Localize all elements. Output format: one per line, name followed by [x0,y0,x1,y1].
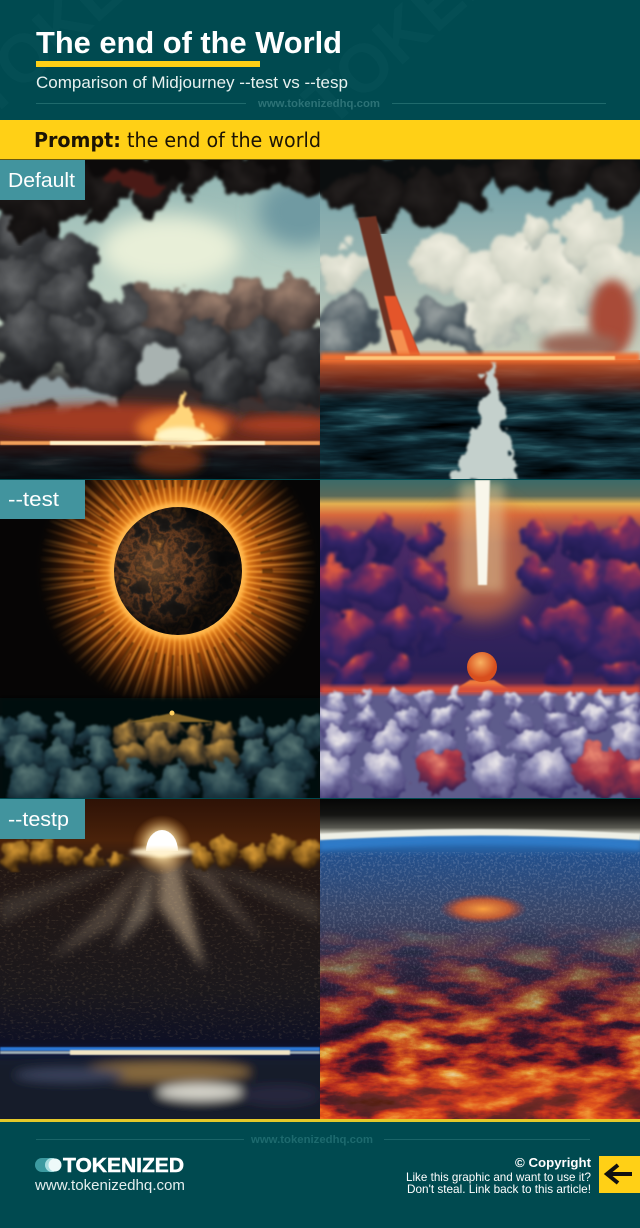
tab: test [0,480,85,519]
tab: testp [0,799,85,839]
blue horizon and lower land [0,1046,320,1119]
icon: yellow arrow box [599,1156,640,1193]
planet [114,507,242,635]
image: default left, smoke clouds and explosion over sea [0,150,342,479]
prompt bar [0,120,640,160]
header panel [36,31,606,110]
logo: www.tokenizedhq.com [34,1177,185,1194]
logo [34,1155,185,1194]
tab: Default: Default [8,170,75,192]
copyright note: Don't steal. Link back to this article! [407,1182,591,1196]
upper clouds [306,520,640,695]
orange sphere [458,652,512,692]
title: The end of the World [36,25,342,60]
image: testp left, sun rising over planet with light rays [0,799,320,1119]
tab: testp: --testp [8,809,69,831]
title underline [36,61,260,67]
fire tornado [358,216,420,356]
orange blot [439,894,527,924]
black smoke at top [0,150,340,237]
tab: test: --test [8,489,59,511]
website watermark: www.tokenizedhq.com [257,98,380,110]
sea and road of light [320,353,640,479]
clouds below [0,710,320,798]
image: default right, fire tornado over sea [300,148,640,479]
footer website watermark: www.tokenizedhq.com [250,1134,373,1146]
light beam [460,480,504,592]
clouds on top horizon [2,836,322,869]
image: testp right, earth from orbit with lava [320,799,640,1126]
sun glow [130,815,194,875]
black cloud mass [320,160,640,234]
tab: Default [0,160,85,200]
copyright note: © Copyright [515,1155,592,1170]
copyright note: Like this graphic and want to use it? [406,1170,591,1184]
prompt bar: Prompt: the end of the world [34,128,321,152]
subtitle: Comparison of Midjourney --test vs --tesp [36,73,348,92]
image: test left, ringed planet with solar rays [0,480,320,798]
logo: TOKENIZED [63,1155,184,1177]
lava [320,920,640,1119]
cloud sea [306,686,640,804]
image: test right, purple clouds, beam and orange sphere [306,480,640,804]
footer panel [0,1119,640,1228]
explosion [0,392,320,474]
light rays [0,855,320,970]
copyright note [406,1155,592,1196]
